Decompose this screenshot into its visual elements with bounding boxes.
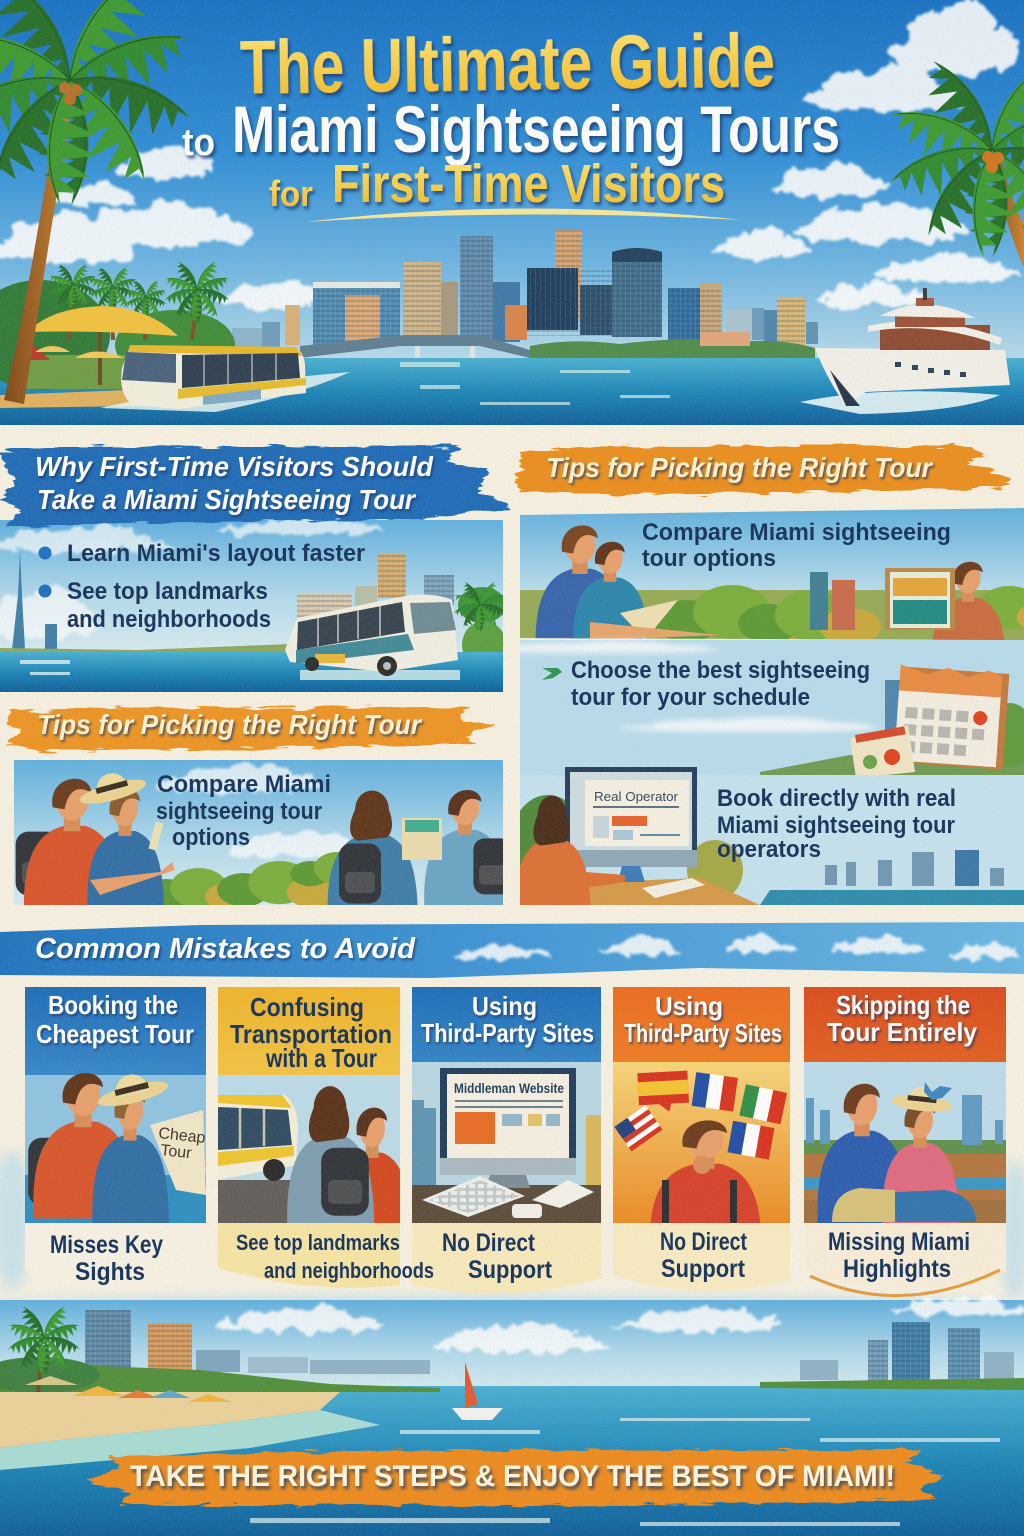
bottom haze [0, 1150, 1024, 1315]
card 3 heading: Using [472, 991, 537, 1021]
header: tips for picking the right tour: Tips for Picking the Right Tour [546, 452, 934, 483]
header: why first-time visitors: Take a Miami Sightseeing Tour [37, 484, 417, 515]
couple with brochure: Tour [160, 1142, 193, 1162]
header: tips for picking the right tour [515, 446, 1012, 495]
card 3: third-party sites [412, 987, 601, 1294]
travelers from behind [287, 1086, 411, 1242]
card 5 heading: Skipping the [836, 990, 970, 1020]
title line 3: for [269, 173, 313, 214]
card 3 caption: Support [468, 1256, 553, 1284]
icon: monitor: Middleman Website [454, 1080, 564, 1096]
icon: yellow bus [218, 1095, 298, 1181]
icon: tour bus [100, 345, 350, 412]
skyline behind bus [297, 553, 503, 652]
card 5 heading [827, 990, 977, 1047]
icon: flag speech bubbles [614, 1071, 787, 1160]
icon: tablet [850, 725, 915, 778]
title line 2: to [182, 122, 215, 164]
left skyline [85, 1310, 430, 1374]
text: compare options: Compare Miami [157, 771, 331, 798]
beach umbrellas [25, 1376, 232, 1402]
card 1 heading: Cheapest Tour [36, 1019, 194, 1049]
card 5 caption: Missing Miami [828, 1228, 970, 1256]
text: compare options: sightseeing tour [156, 798, 322, 825]
card 5 caption: Highlights [843, 1255, 951, 1283]
bullet list [38, 540, 365, 633]
card 5 heading: Tour Entirely [827, 1017, 977, 1047]
card 2 caption [236, 1230, 434, 1283]
card 4 caption [660, 1228, 748, 1283]
call-to-action banner: TAKE THE RIGHT STEPS & ENJOY THE BEST OF MIAMI! [130, 1460, 895, 1493]
bullet list: Learn Miami's layout faster [67, 540, 365, 567]
title [182, 18, 840, 222]
choose section [480, 640, 1024, 780]
umbrella [28, 306, 178, 385]
header: tips for picking the right tour [5, 707, 495, 750]
icon: sailboat [452, 1362, 503, 1420]
icon: coach bus [285, 595, 458, 676]
card 1 caption: Misses Key [50, 1231, 163, 1259]
icon: green arrow bullet [542, 668, 562, 680]
bridge [300, 335, 530, 358]
text: choose: Choose the best sightseeing [571, 657, 870, 684]
greenery left [0, 280, 235, 408]
trees and shore [0, 1357, 1024, 1393]
footer scene [0, 1298, 1024, 1536]
icon: yacht [800, 288, 1010, 414]
water [0, 358, 1024, 425]
card 2 heading [230, 992, 392, 1073]
icon: computer monitor: Real Operator [594, 789, 679, 804]
card 2 heading: Confusing [250, 992, 364, 1022]
card 3 caption: No Direct [442, 1229, 536, 1257]
skyline [825, 850, 1004, 886]
buildings [810, 572, 855, 630]
call-to-action banner [85, 1450, 945, 1506]
text: book: operators [717, 836, 821, 863]
icon: footer palm [5, 1303, 83, 1395]
bullet list: See top landmarks [67, 578, 268, 605]
icon: monitor [440, 1068, 576, 1188]
text: book: Miami sightseeing tour [717, 812, 955, 839]
card 4: third-party sites flags [613, 987, 790, 1291]
icon: small bird [924, 1082, 952, 1100]
skyline [232, 230, 818, 358]
card 2: transportation [218, 987, 434, 1288]
card 2 caption: See top landmarks [236, 1230, 400, 1255]
compare section [520, 508, 1024, 640]
woman at computer [514, 795, 625, 926]
text: compare: tour options [642, 545, 776, 572]
icon: calendar [894, 664, 1009, 770]
card 4 heading [624, 991, 782, 1048]
tips scene [14, 760, 503, 905]
greenery [162, 852, 339, 905]
water [0, 1386, 1024, 1536]
panel: common mistakes [0, 922, 1024, 1315]
text: compare options: options [172, 824, 250, 851]
small palms [47, 259, 232, 340]
book section [508, 767, 1024, 926]
thoughtful man [650, 1120, 762, 1250]
distant shoreline [0, 644, 288, 652]
icon: computer monitor [565, 767, 697, 882]
text: book [717, 785, 956, 863]
card 2 heading: Transportation [230, 1019, 392, 1049]
text: choose: tour for your schedule [571, 684, 810, 711]
title line 1: The Ultimate Guide [239, 18, 775, 111]
header: why first-time visitors [0, 446, 510, 528]
panel: tips left [5, 707, 513, 920]
panel: why take a tour [0, 446, 510, 692]
card 3 heading [421, 991, 594, 1048]
icon: left palm tree [0, 0, 200, 404]
text: compare [642, 519, 951, 572]
beach [0, 1392, 340, 1448]
right skyline [800, 1322, 1014, 1382]
card 1 caption: Sights [75, 1258, 145, 1286]
card 1 caption [50, 1231, 163, 1286]
couple with map [16, 773, 175, 905]
card 4 heading: Using [655, 991, 723, 1021]
card 1 heading: Booking the [48, 990, 178, 1020]
card 4 caption: Support [661, 1255, 746, 1283]
icon: keyboard and notebook [422, 1176, 594, 1218]
travelers reading map [328, 790, 503, 905]
notebook [642, 878, 705, 898]
couple with brochure [536, 525, 720, 639]
woman at schedule board [885, 562, 1004, 640]
bullet list: and neighborhoods [67, 606, 271, 633]
couple with brochure: Cheap [158, 1125, 206, 1147]
hero scene [0, 0, 1024, 425]
couple with brochure [28, 1066, 206, 1227]
card 2 caption: and neighborhoods [264, 1258, 434, 1283]
text: compare: Compare Miami sightseeing [642, 519, 951, 546]
header: why first-time visitors: Why First-Time Visitors Should [35, 451, 434, 482]
card 1 heading [36, 990, 194, 1049]
header: tips for picking the right tour: Tips for Picking the Right Tour [37, 709, 423, 740]
card 3 caption [442, 1229, 553, 1284]
card 4 caption: No Direct [660, 1228, 748, 1256]
title line 2: Miami Sightseeing Tours [232, 92, 840, 166]
couple on bench [818, 1084, 976, 1227]
card 5: skipping the tour [804, 987, 1006, 1296]
card 2 heading: with a Tour [265, 1043, 377, 1073]
foam [250, 1418, 1000, 1526]
card 4 heading: Third-Party Sites [624, 1018, 782, 1048]
card 1: cheapest tour [25, 987, 206, 1291]
text: book: Book directly with real [717, 785, 956, 812]
card 5 caption [828, 1228, 970, 1283]
icon: observation tower [12, 550, 57, 650]
header: common mistakes [0, 922, 1024, 978]
card 3 heading: Third-Party Sites [421, 1018, 594, 1048]
icon: right palm tree [881, 51, 1024, 268]
title line 3: First-Time Visitors [332, 154, 725, 214]
swoosh underline [305, 208, 742, 222]
header: common mistakes: Common Mistakes to Avoid [35, 933, 416, 965]
panel: tips right [480, 446, 1024, 926]
text: compare options [156, 771, 331, 851]
text: choose [571, 657, 870, 711]
